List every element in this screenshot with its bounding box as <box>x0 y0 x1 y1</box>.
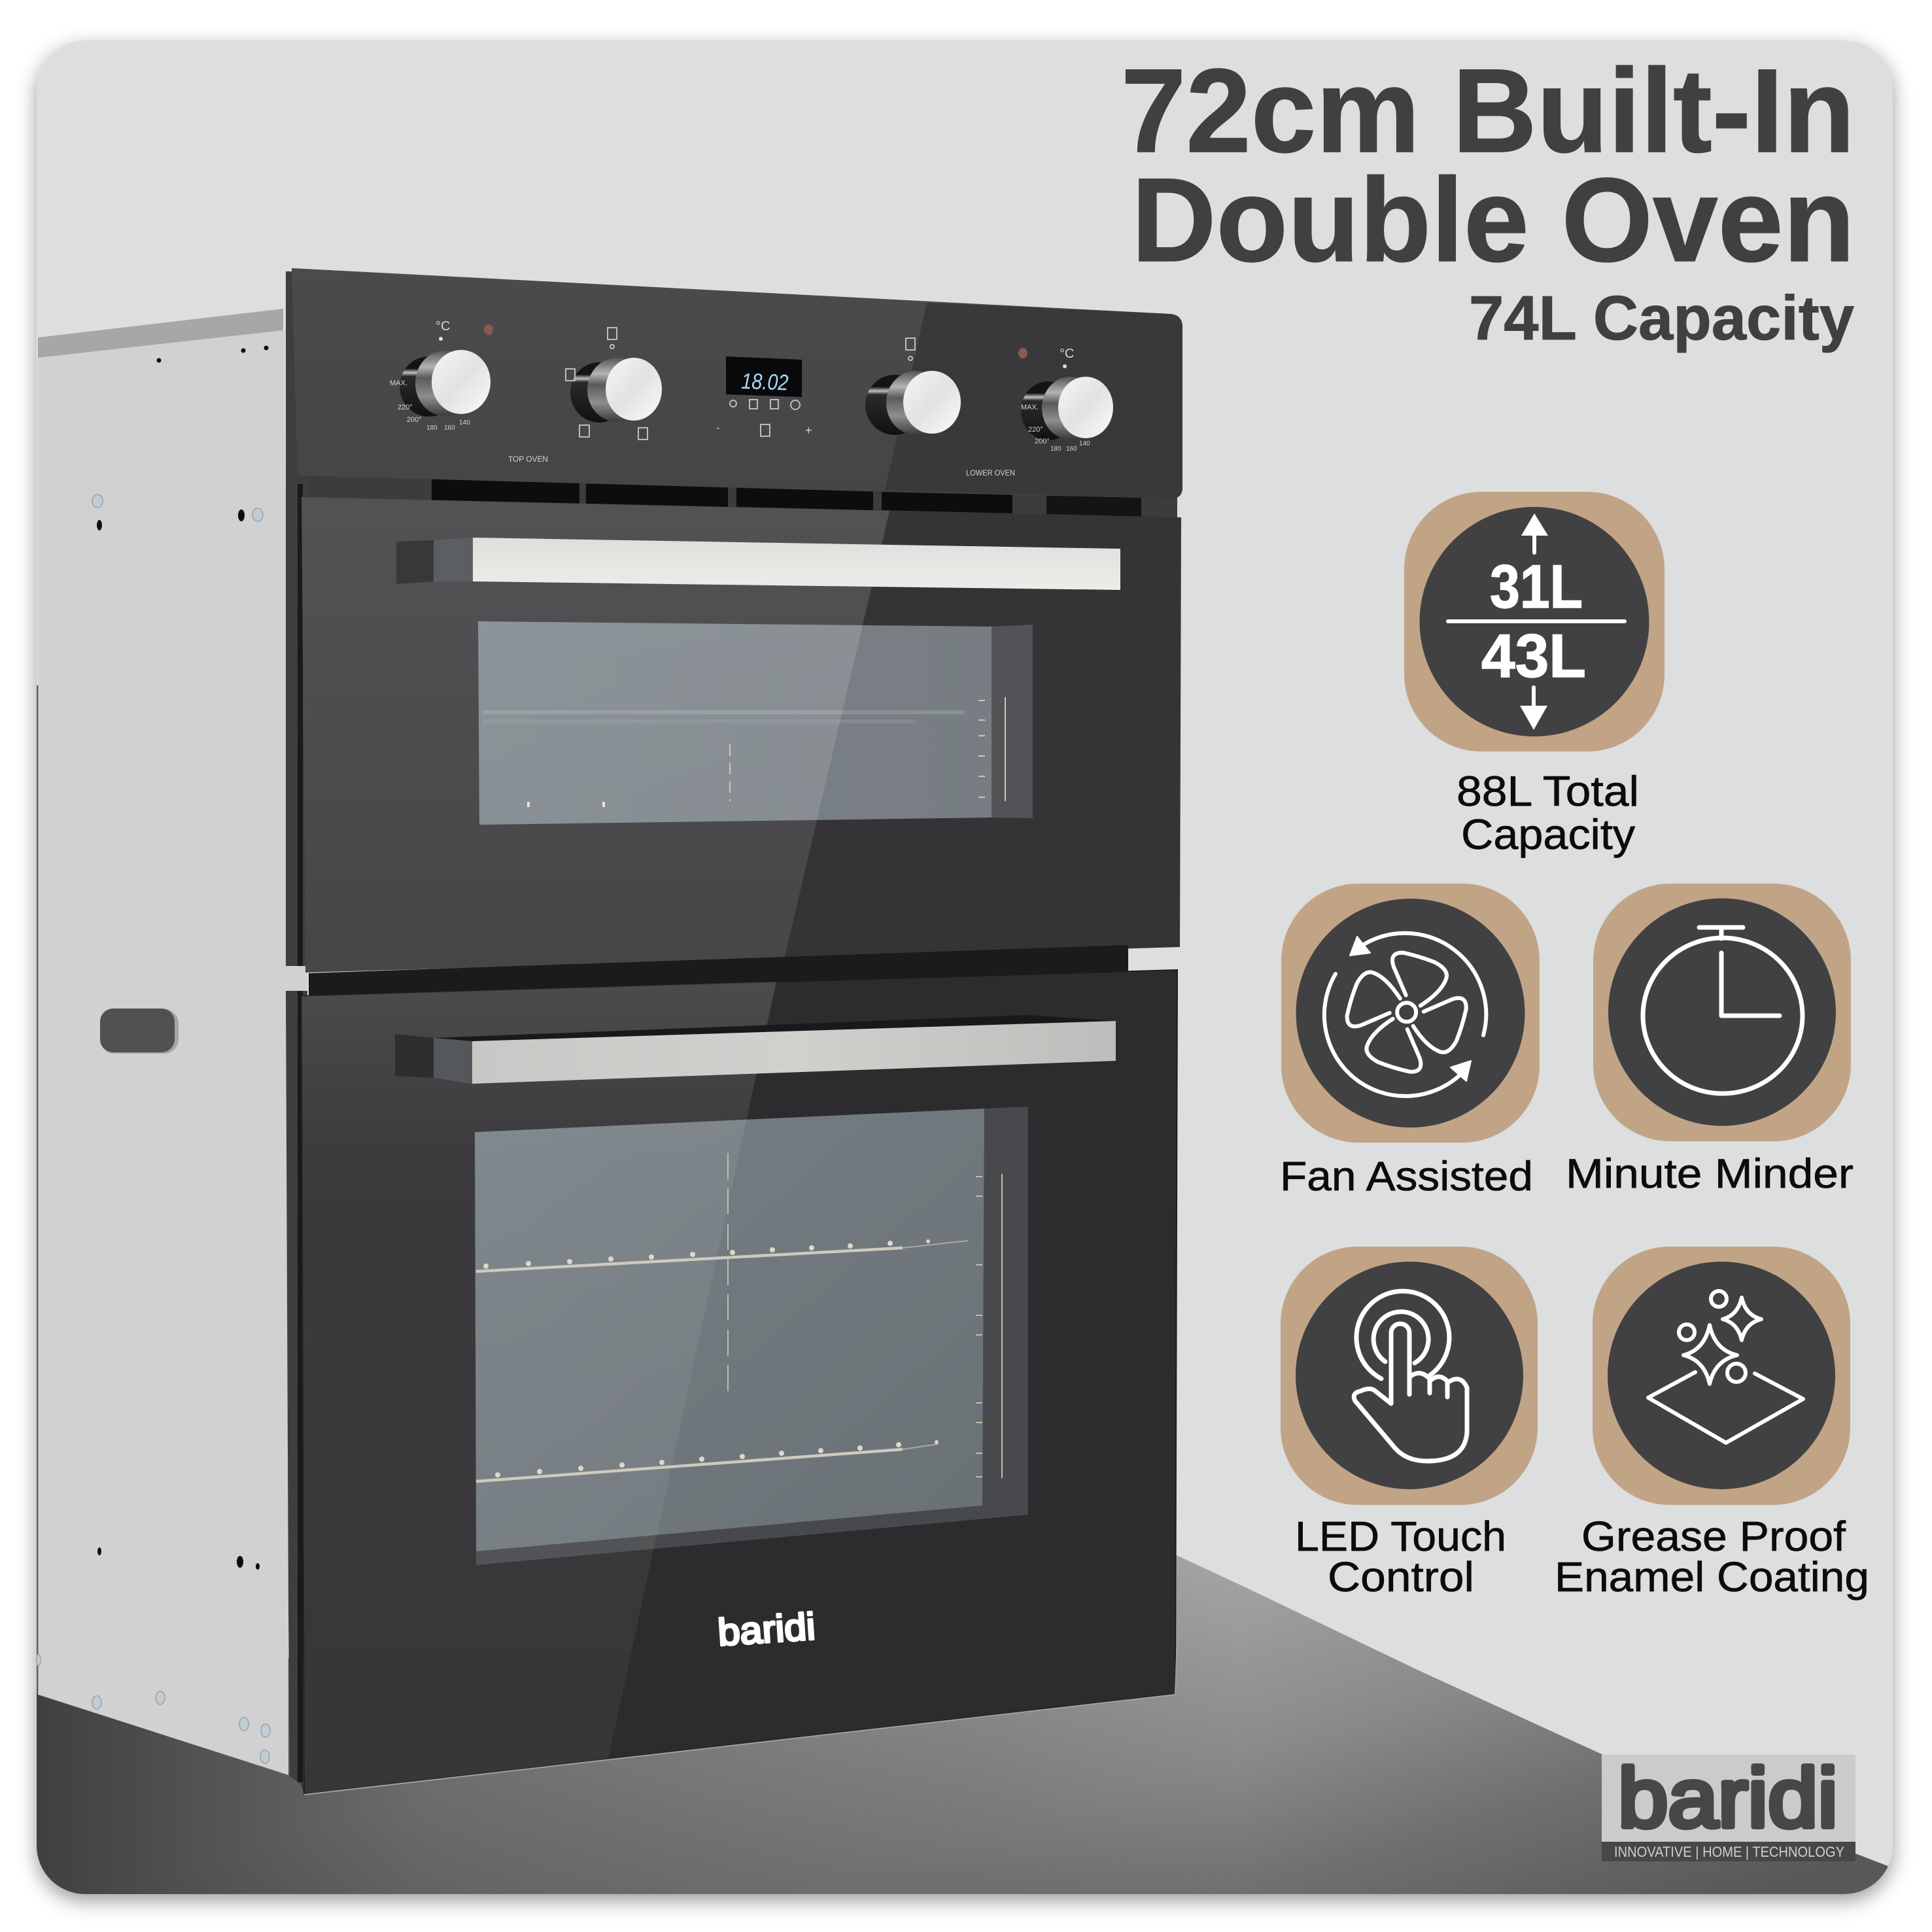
control panel <box>292 268 1182 498</box>
top oven label: TOP OVEN <box>508 455 548 464</box>
knob 2 <box>570 358 662 423</box>
feature: LED touch control <box>1281 1247 1538 1600</box>
cabinet top strip <box>38 309 283 358</box>
feature: fan assisted <box>1280 884 1540 1199</box>
touch icons and buttons <box>716 400 812 437</box>
capacity badge <box>1404 492 1665 751</box>
enamel label <box>1555 1513 1869 1600</box>
knob 4 <box>1021 377 1113 440</box>
heading <box>1121 44 1855 353</box>
capacity label: Capacity <box>1461 810 1636 858</box>
top door handle <box>396 538 1120 590</box>
oven side cabinet <box>37 309 307 1775</box>
oven front frame upper <box>286 271 307 966</box>
temperature labels: 140 <box>459 419 470 426</box>
icon: fan <box>1324 933 1486 1096</box>
temperature labels: 140 <box>1079 440 1090 447</box>
vent band <box>307 474 1177 523</box>
lower oven window <box>475 1107 1028 1565</box>
oven illustration <box>37 268 1182 1795</box>
LED label: LED Touch <box>1295 1513 1506 1560</box>
touch icons and buttons: - <box>716 423 719 434</box>
cabinet edge line <box>37 685 38 1693</box>
lower oven label: LOWER OVEN <box>966 468 1015 477</box>
temperature labels: °C <box>1060 347 1074 361</box>
knob 1 <box>400 350 491 417</box>
fan label: Fan Assisted <box>1280 1154 1533 1199</box>
capacity values: 43L <box>1481 621 1586 690</box>
fan badge <box>1281 884 1540 1143</box>
arrow down <box>1520 685 1547 730</box>
temperature labels: 200° <box>407 416 422 424</box>
icon: stopwatch <box>1643 927 1803 1094</box>
indicator lights <box>484 324 1027 358</box>
floor wedge <box>37 1555 1893 1894</box>
icon: sparkle plate <box>1648 1291 1803 1443</box>
oven front frame lower <box>286 991 307 1793</box>
minute minder badge <box>1593 884 1851 1141</box>
capacity label: 88L Total <box>1457 767 1639 815</box>
LED label: Control <box>1328 1553 1474 1600</box>
logo wordmark: baridi <box>1618 1751 1838 1845</box>
enamel label: Grease Proof <box>1581 1513 1846 1560</box>
lower door glass reflection <box>302 982 776 1794</box>
door gap <box>309 945 1128 996</box>
top window details <box>528 697 1005 807</box>
LED label <box>1295 1513 1506 1600</box>
subheading: 74L Capacity <box>1469 283 1854 353</box>
cabinet side handle slot <box>100 1009 179 1054</box>
capacity values: 31L <box>1490 552 1583 621</box>
top oven window <box>478 621 1033 825</box>
temperature labels <box>390 319 1090 453</box>
logo tagline band: INNOVATIVE | HOME | TECHNOLOGY <box>1614 1844 1844 1860</box>
temperature labels: 220° <box>1028 426 1043 434</box>
temperature labels: 160 <box>1066 445 1077 453</box>
door bottom edge <box>304 1635 1177 1795</box>
temperature labels: MAX. <box>1021 404 1039 411</box>
arrow up <box>1521 513 1548 555</box>
enamel label: Enamel Coating <box>1555 1553 1869 1600</box>
lower window details <box>728 1153 1002 1478</box>
temperature labels: 200° <box>1035 438 1050 445</box>
temperature labels: 220° <box>398 404 413 411</box>
temperature labels: °C <box>436 319 450 334</box>
heading line 1: 72cm Built-In <box>1121 44 1855 177</box>
digital display <box>726 356 802 397</box>
temperature labels: MAX. <box>390 379 407 387</box>
top oven door <box>302 497 1181 973</box>
LED badge <box>1281 1247 1538 1505</box>
lower door handle <box>395 1015 1116 1084</box>
capacity values <box>1446 552 1627 690</box>
cabinet holes and screws <box>37 345 270 1763</box>
icon: touch hand <box>1354 1291 1467 1461</box>
temperature labels: 180 <box>1050 445 1061 453</box>
oven rack lower <box>476 1440 939 1481</box>
feature: enamel coating <box>1555 1247 1869 1600</box>
minute minder label: Minute Minder <box>1566 1151 1854 1197</box>
function symbols <box>566 328 915 440</box>
top door glass reflection <box>302 497 889 973</box>
door brand logo: baridi <box>717 1605 817 1654</box>
feature: capacity <box>1404 492 1665 858</box>
knob 3 <box>865 371 961 435</box>
heading line 2: Double Oven <box>1131 153 1855 286</box>
capacity label <box>1457 767 1639 858</box>
digital display: 18.02 <box>741 369 789 396</box>
enamel badge <box>1593 1247 1850 1505</box>
lower oven door <box>302 970 1177 1795</box>
oven rack upper <box>476 1239 968 1271</box>
brand logo <box>1602 1751 1855 1861</box>
temperature labels: 160 <box>444 424 455 432</box>
feature: minute minder <box>1566 884 1854 1197</box>
temperature labels: 180 <box>426 424 438 432</box>
touch icons and buttons: + <box>805 424 812 437</box>
control panel reflection <box>885 303 1182 498</box>
